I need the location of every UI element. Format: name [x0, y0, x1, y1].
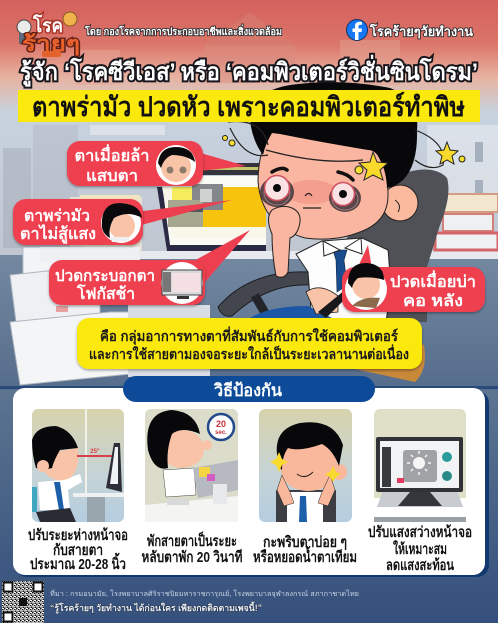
- callout: neck and back pain: ปวดเมื่อยบ่า: [390, 270, 476, 291]
- step 4 caption: ลดแสงสะท้อน: [386, 557, 455, 574]
- QR code: [2, 581, 44, 623]
- step 3 caption: [253, 533, 357, 566]
- white prevention card: [0, 386, 498, 577]
- step 1 caption: ปรับระยะห่างหน้าจอ: [28, 527, 128, 544]
- definition box: [77, 318, 425, 382]
- callout: neck and back pain: คอ หลัง: [403, 292, 463, 310]
- step 4 caption: [368, 524, 472, 574]
- dizzy star right: [436, 142, 458, 164]
- pants: [250, 306, 340, 322]
- body shirt: [296, 238, 390, 322]
- binder shelf: [435, 194, 498, 250]
- step 1 caption: กับสายตา: [53, 542, 103, 559]
- step 2 caption: [142, 531, 243, 566]
- step 2 illustration: 20: [216, 419, 226, 429]
- step 3 illustration: [259, 409, 352, 522]
- right eye: [332, 182, 354, 206]
- step 1 caption: ประมาณ 20-28 นิ้ว: [30, 552, 126, 573]
- floor and wall lower area: [0, 255, 498, 390]
- lower hand: [306, 288, 338, 314]
- step 2 caption: พักสายตาเป็นระยะ: [147, 531, 237, 550]
- definition box: คือ กลุ่มอาการทางตาที่สัมพันธ์กับการใช้คอมพิวเตอร์: [100, 326, 398, 345]
- raised hand: [268, 206, 300, 277]
- step 2 illustration: [145, 409, 238, 522]
- step 4 caption: ให้เหมาะสม: [393, 540, 447, 558]
- callout: neck and back pain: [342, 245, 485, 312]
- callout: eye strain: ตาเมื่อยล้า: [74, 144, 150, 165]
- prevention heading pill: [123, 376, 375, 402]
- computer monitor: [157, 163, 266, 251]
- left eye: [264, 176, 290, 200]
- step 3 caption: หรือหยอดน้ำตาเทียม: [253, 545, 357, 566]
- tie: [333, 250, 347, 292]
- dizzy star near forehead: [359, 152, 388, 180]
- callout: blurred vision: ตาพร่ามัว: [24, 207, 90, 225]
- step 2 caption: หลับตาพัก 20 วินาที: [142, 548, 243, 566]
- definition box: และการใช้สายตามองจอระยะใกล้เป็นระยะเวลานานต่อเนื่อง: [89, 344, 409, 362]
- collar: [323, 238, 362, 256]
- organisation text: โดย กองโรคจากการประกอบอาชีพและสิ่งแวดล้อม: [84, 24, 282, 38]
- callout: eye strain: [67, 141, 246, 186]
- step 1 caption: [28, 527, 128, 573]
- callout: dry eye and slow focus: [49, 230, 250, 305]
- eyebrows: [272, 168, 353, 180]
- ear: [382, 185, 418, 221]
- callout: eye strain: แสบตา: [86, 168, 138, 185]
- prevention heading pill: วิธีป้องกัน: [214, 380, 282, 400]
- icon: facebook: [346, 20, 368, 40]
- left eye bag: [260, 177, 294, 207]
- paper stacks: [10, 195, 210, 385]
- step 1 illustration: [32, 409, 124, 522]
- step 2 illustration: sec.: [215, 430, 227, 436]
- character: [222, 82, 465, 322]
- logo: โรค: [32, 14, 63, 37]
- step 4 caption: ปรับแสงสว่างหน้าจอ: [368, 524, 472, 541]
- follow page tagline: “รู้โรคร้ายๆ วัยทำงาน ได้ก่อนใคร เพียงกดติดตามเพจนี้!”: [50, 601, 262, 614]
- hair: [250, 82, 417, 188]
- logo: [17, 12, 80, 57]
- cheek blush: [285, 180, 337, 204]
- office chair: [218, 170, 448, 322]
- step 4 illustration: [374, 409, 466, 522]
- nose and mouth: [303, 194, 321, 208]
- logo: ร้ายๆ: [22, 32, 80, 56]
- background office building: [3, 12, 498, 255]
- right eye bag: [329, 184, 361, 212]
- callout: dry eye and slow focus: ปวดกระบอกตา: [55, 268, 155, 285]
- white desk: [100, 251, 498, 259]
- callout: dry eye and slow focus: โฟกัสช้า: [76, 283, 135, 303]
- step 1 illustration: 25": [90, 449, 100, 455]
- step 3 caption: กะพริบตาบ่อย ๆ: [263, 533, 347, 551]
- facebook page name: โรคร้ายๆวัยทำงาน: [369, 23, 473, 39]
- dizzy swirl: [228, 121, 443, 168]
- face: [258, 131, 388, 239]
- callout: blurred vision: ตาไม่สู้แสง: [20, 224, 96, 245]
- callout: blurred vision: [13, 199, 232, 245]
- sources: ที่มา : กรมอนามัย, โรงพยาบาลศิริราชปิยมหาราชการุณย์, โรงพยาบาลจุฬาลงกรณ์ สภากาชาดไทย: [50, 589, 359, 598]
